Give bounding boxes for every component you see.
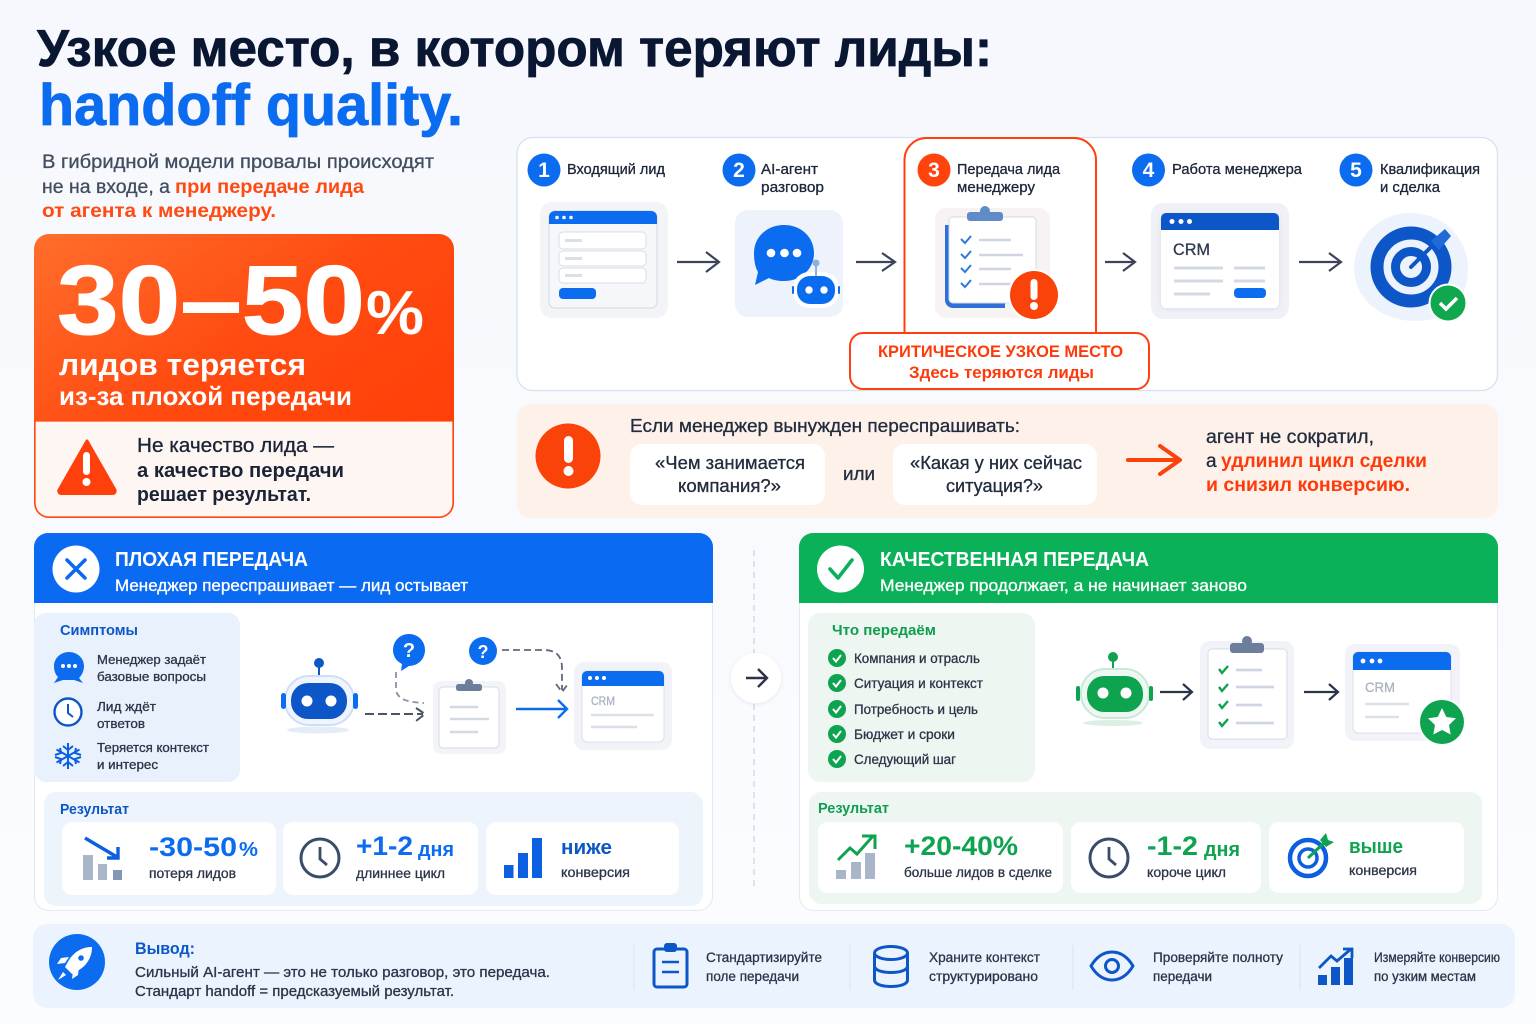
panel: key statistic	[34, 234, 454, 518]
icon: clipboard	[433, 679, 506, 754]
checklist: Ситуация и контекст	[854, 676, 983, 691]
panel: re-asking warning	[517, 404, 1498, 518]
step 3: handoff to manager: Передача лида	[957, 162, 1061, 178]
consequence text	[1206, 427, 1427, 496]
icon: bar chart	[504, 838, 542, 878]
icon: green robot	[1076, 652, 1153, 726]
checklist	[828, 649, 983, 768]
tip: store context: Храните контекст	[929, 950, 1040, 965]
question box 2	[893, 444, 1097, 505]
consequence text: и снизил конверсию.	[1206, 475, 1410, 496]
step 3: handoff to manager	[918, 154, 1061, 321]
icon: target with green dart	[1290, 833, 1334, 876]
icon: question bubble 1: ?	[403, 640, 415, 662]
conclusion text: Вывод:	[135, 939, 195, 958]
icon: CRM window with star: CRM	[1365, 679, 1395, 695]
tip: check completeness: Проверяйте полноту	[1153, 950, 1283, 965]
arrow: consequence	[1128, 446, 1180, 474]
panel: symptoms: Менеджер задаёт	[97, 652, 206, 667]
conclusion text: Стандарт handoff = предсказуемый результат.	[135, 983, 454, 1000]
panel: what is handed over: Что передаём	[832, 623, 936, 639]
tip: standardize fields: поле передачи	[706, 969, 799, 984]
takeaway box: Не качество лида —	[137, 435, 334, 457]
panel: what is handed over	[808, 613, 1035, 782]
icon: rocket	[49, 934, 105, 990]
step 4: manager work	[1132, 154, 1303, 319]
title: handoff quality.	[39, 73, 463, 138]
icon: alert circle	[536, 424, 600, 488]
tip: standardize fields	[654, 943, 822, 987]
consequence text: удлинил цикл сделки	[1221, 451, 1427, 472]
step 4: manager work: CRM	[1173, 240, 1210, 259]
callout: critical bottleneck	[850, 333, 1149, 389]
icon: question circle 2: ?	[478, 642, 488, 662]
question box 1	[630, 444, 825, 505]
icon: clock	[301, 839, 339, 877]
icon: CRM window: CRM	[591, 694, 615, 708]
metric: longer cycle: +1-2	[356, 831, 413, 861]
icon: red alert badge	[1008, 269, 1060, 321]
icon: blue robot	[281, 658, 358, 734]
step 4: manager work: Работа менеджера	[1172, 162, 1303, 178]
stat caption: из-за плохой передачи	[59, 381, 352, 411]
panel: symptoms: Теряется контекст	[97, 740, 209, 755]
step 2: AI agent conversation	[722, 154, 843, 317]
header: bad handoff	[34, 533, 713, 603]
step 2: AI agent conversation: AI-агент	[761, 162, 818, 178]
intro text: В гибридной модели провалы происходят	[42, 151, 434, 173]
arrow: dashed to clipboard	[365, 708, 425, 721]
header: bad handoff: ПЛОХАЯ ПЕРЕДАЧА	[115, 549, 308, 571]
consequence text: агент не сократил,	[1206, 427, 1374, 448]
stat caption	[59, 347, 352, 411]
panel: good result	[809, 792, 1482, 904]
takeaway box: решает результат.	[137, 484, 311, 506]
divider with transition arrow	[731, 550, 781, 888]
panel: good result: Результат	[818, 801, 889, 817]
tip: store context: структурировано	[929, 969, 1038, 984]
panel: symptoms	[34, 613, 240, 782]
metric: lower conversion: конверсия	[561, 865, 630, 880]
step 2: AI agent conversation: 2	[733, 159, 745, 182]
diagram: broken handoff flow	[281, 634, 672, 754]
step 5: qualification and deal: 5	[1350, 159, 1362, 182]
panel: re-asking warning: или	[843, 464, 875, 484]
checklist: Потребность и цель	[854, 702, 978, 717]
tip: measure conversion	[1318, 949, 1500, 985]
metric: lead loss: %	[239, 839, 258, 861]
arrow: blue to CRM	[516, 700, 567, 718]
arrow: step 3 to 4	[1105, 253, 1135, 271]
step 4: manager work: 4	[1143, 159, 1155, 182]
icon: question bubble 1	[393, 634, 425, 671]
metric: more leads	[818, 822, 1063, 893]
metric: lead loss: потеря лидов	[149, 866, 236, 881]
metric: lower conversion: ниже	[561, 837, 612, 859]
intro text: при передаче лида	[175, 176, 364, 198]
arrow: robot to clipboard	[1160, 684, 1192, 700]
metric: more leads: +20-40%	[904, 831, 1018, 861]
checklist: Бюджет и сроки	[854, 727, 955, 742]
panel: symptoms: Симптомы	[60, 623, 138, 639]
metric: higher conversion: выше	[1349, 836, 1403, 858]
question box 1: «Чем занимается	[655, 453, 805, 473]
header: quality handoff: КАЧЕСТВЕННАЯ ПЕРЕДАЧА	[880, 549, 1149, 571]
metric: more leads: больше лидов в сделке	[904, 865, 1052, 880]
icon: snowflake	[55, 743, 81, 769]
panel: quality handoff	[799, 533, 1498, 910]
arrow: step 4 to 5	[1299, 253, 1341, 271]
tip: check completeness: передачи	[1153, 969, 1212, 984]
step 2: AI agent conversation: разговор	[761, 180, 824, 196]
tip: check completeness	[1091, 950, 1283, 984]
consequence text: а	[1206, 451, 1217, 472]
step 5: qualification and deal: Квалификация	[1380, 162, 1480, 178]
stat number: %	[366, 279, 424, 348]
arrow: clipboard to CRM	[1304, 684, 1338, 700]
panel: symptoms: базовые вопросы	[97, 669, 206, 684]
stat number: 30–50	[57, 245, 365, 355]
panel: symptoms: Лид ждёт	[97, 699, 156, 714]
question box 1: компания?»	[678, 476, 781, 496]
icon: CRM window	[574, 662, 672, 750]
header: quality handoff	[799, 533, 1498, 603]
metric: lower conversion	[486, 822, 679, 895]
panel: conclusion	[33, 924, 1515, 1008]
tip: store context	[874, 946, 1040, 986]
metric: longer cycle: длиннее цикл	[356, 866, 445, 881]
panel: bad result: Результат	[60, 802, 129, 818]
metric: lead loss: -30-50	[149, 832, 237, 862]
diagram: clean handoff flow	[1076, 636, 1466, 749]
callout: critical bottleneck: КРИТИЧЕСКОЕ УЗКОЕ МЕСТО	[878, 342, 1123, 361]
icon: question circle 2	[469, 637, 497, 665]
panel: symptoms: ответов	[97, 716, 145, 731]
takeaway box	[35, 421, 453, 517]
icon: checked clipboard	[1200, 636, 1294, 749]
step 3: handoff to manager: менеджеру	[957, 180, 1036, 196]
tip: measure conversion: по узким местам	[1374, 969, 1476, 984]
step 1: incoming lead	[528, 154, 668, 318]
panel: bad handoff	[34, 533, 713, 910]
metric: lead loss	[62, 822, 276, 895]
callout: critical bottleneck: Здесь теряются лиды	[909, 363, 1094, 382]
metric: shorter cycle: дня	[1204, 839, 1240, 861]
step 5: qualification and deal	[1340, 154, 1480, 322]
checklist: Следующий шаг	[854, 752, 956, 767]
panel: symptoms: и интерес	[97, 757, 159, 772]
icon: clock	[1090, 839, 1128, 877]
tip: standardize fields: Стандартизируйте	[706, 950, 822, 965]
icon: chat bubble	[54, 652, 84, 683]
panel: handoff process flow	[517, 138, 1498, 390]
header: bad handoff: Менеджер переспрашивает — лид остывает	[115, 577, 468, 595]
question box 2: «Какая у них сейчас	[910, 453, 1082, 473]
header: quality handoff: Менеджер продолжает, а не начинает заново	[880, 577, 1247, 595]
conclusion text: Сильный AI-агент — это не только разговор, это передача.	[135, 964, 550, 981]
panel: re-asking warning: Если менеджер вынужден переспрашивать:	[630, 416, 1020, 436]
intro text: от агента к менеджеру.	[42, 200, 276, 222]
metric: higher conversion: конверсия	[1349, 863, 1417, 878]
step 1: incoming lead: 1	[538, 159, 550, 182]
metric: shorter cycle	[1071, 822, 1261, 893]
stat caption: лидов теряется	[59, 347, 306, 382]
icon: CRM window with star	[1345, 644, 1466, 746]
arrow: step 1 to 2	[677, 252, 719, 272]
step 5: qualification and deal: и сделка	[1380, 180, 1441, 196]
step 3 highlight frame	[904, 138, 1096, 333]
arrow: step 2 to 3	[856, 253, 895, 271]
step 3: handoff to manager: 3	[928, 159, 940, 182]
metric: shorter cycle: -1-2	[1147, 831, 1198, 861]
icon: clock	[54, 698, 82, 726]
icon: growth chart	[836, 836, 875, 879]
tip: measure conversion: Измеряйте конверсию	[1374, 950, 1500, 965]
conclusion text	[135, 939, 550, 1000]
panel: bad result	[44, 792, 703, 906]
metric: higher conversion	[1269, 822, 1464, 893]
question box 2: ситуация?»	[946, 476, 1043, 496]
title	[37, 20, 992, 138]
metric: shorter cycle: короче цикл	[1147, 865, 1226, 880]
icon: falling bars	[83, 838, 122, 880]
metric: longer cycle	[283, 822, 478, 895]
step 1: incoming lead: Входящий лид	[567, 162, 666, 178]
takeaway box: а качество передачи	[137, 460, 344, 482]
title: Узкое место, в котором теряют лиды:	[37, 20, 992, 78]
icon: warning triangle	[59, 441, 115, 494]
metric: longer cycle: дня	[418, 839, 454, 861]
intro text: не на входе, а	[42, 176, 170, 198]
intro text	[42, 151, 434, 222]
checklist: Компания и отрасль	[854, 651, 980, 666]
